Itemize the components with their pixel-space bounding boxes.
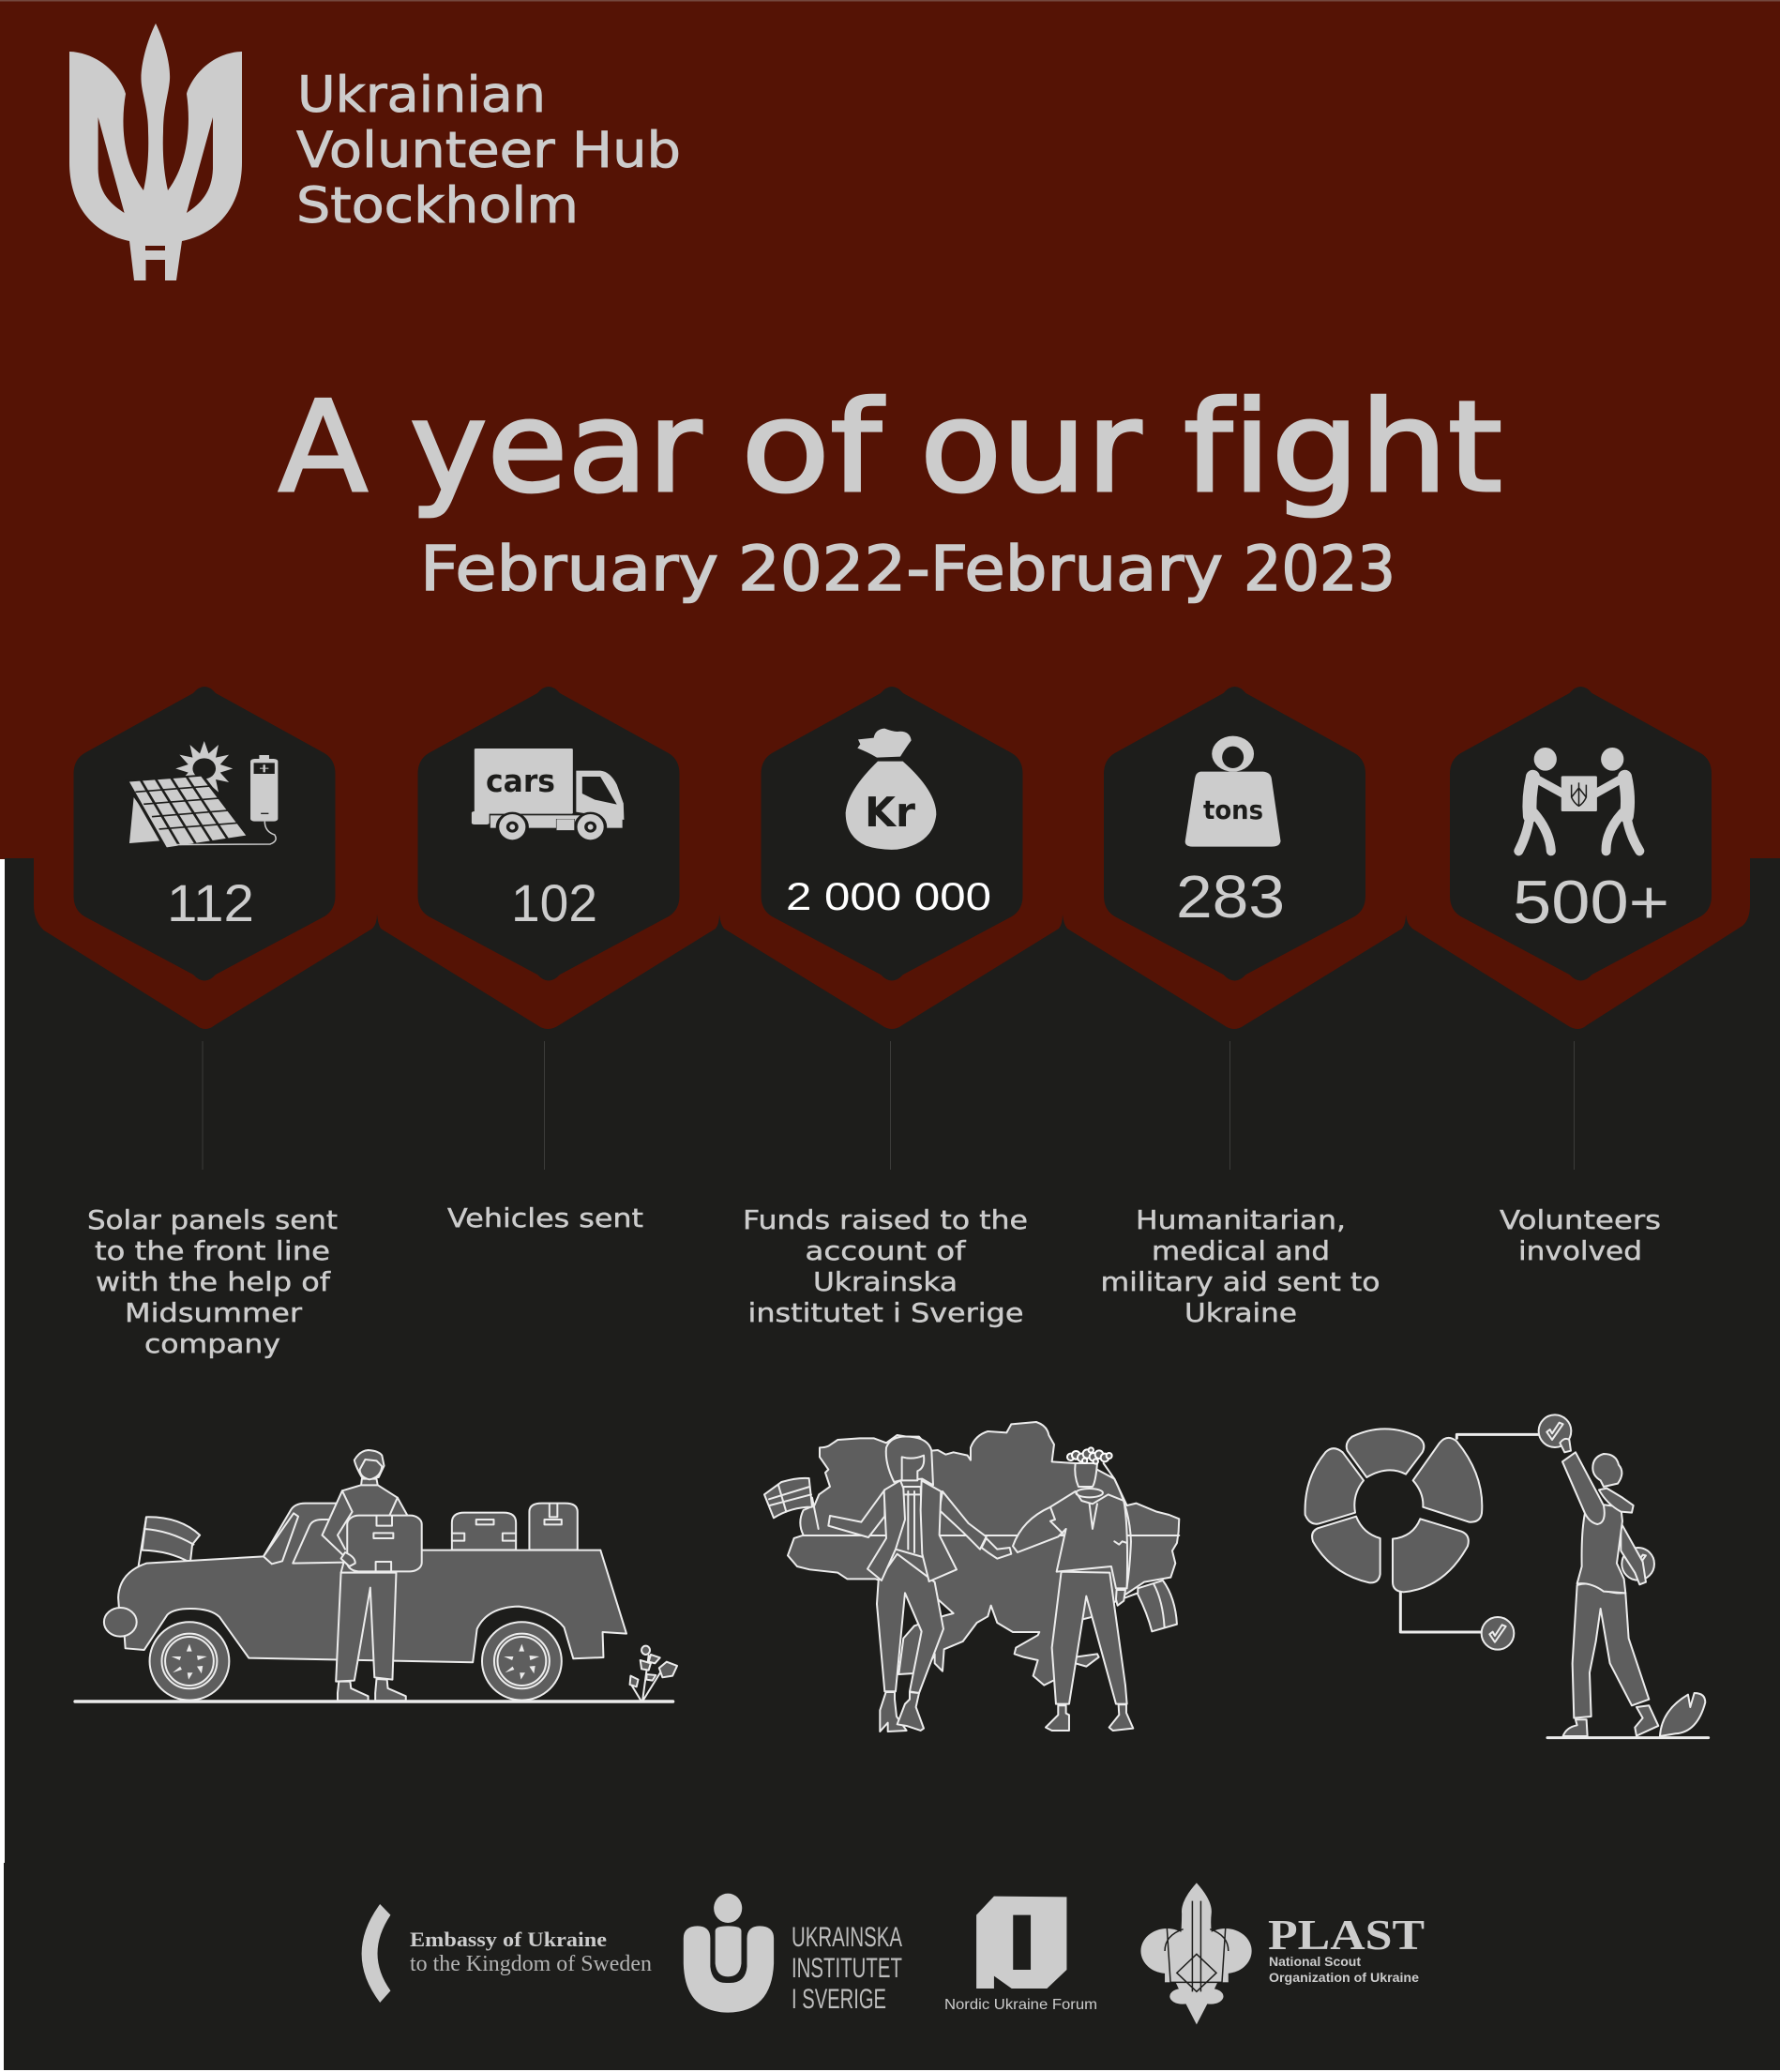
logo name: Volunteer Hub [296,122,681,179]
hexagon [73,687,336,981]
truck body [118,1504,626,1662]
Swedish flag [764,1478,819,1529]
ground line [1547,1736,1709,1739]
title [279,374,1502,521]
subtitle: 2023 [1244,533,1395,605]
connector top [1456,1434,1539,1438]
title: of [741,374,884,521]
logo: Embassy of Ukraine [362,1904,652,2003]
subtitle: 2022-February [738,533,1223,605]
logo: Embassy of Ukraine: to the Kingdom of Sweden [410,1952,652,1976]
panel: dark footer [4,1863,1780,2070]
text: solar panels description: to the front line [95,1236,330,1266]
panel: funds stat [762,687,1022,981]
plant [630,1646,677,1701]
logo: Plast: PLAST [1268,1911,1425,1959]
logo: Nordic Ukraine Forum [944,1897,1097,2013]
text: solar panels description: Solar panels sent [87,1205,338,1235]
text: solar panels description: Midsummer [125,1298,303,1328]
person [1560,1439,1658,1736]
logo: Plast [1140,1883,1425,2024]
text: vehicles description: Vehicles sent [447,1203,643,1233]
title: year [410,374,702,521]
rear wheel [482,1622,562,1701]
hexagon [1104,687,1365,981]
text: aid description: Humanitarian, [1136,1205,1346,1235]
front wheel [150,1622,229,1701]
text: volunteers description: Volunteers [1500,1205,1661,1235]
woman [828,1436,1011,1732]
text: funds description: Funds raised to the [743,1205,1028,1235]
icon label: tons: tons [1203,794,1263,825]
panel: vehicles stat [418,687,679,981]
text: aid description: Ukraine [1184,1298,1297,1328]
logo: Ukrainska Institutet i Sverige [684,1894,902,2015]
hexagon [418,687,679,981]
icon label: cars: cars [486,763,555,799]
logo: Plast: National Scout [1269,1954,1361,1969]
panel: dark body [5,858,1780,1864]
flag [137,1517,200,1578]
leaf [1660,1693,1705,1736]
value: 112: 112 [167,873,254,932]
man [1013,1447,1177,1731]
man [322,1450,422,1701]
text: aid description: medical and [1152,1236,1330,1266]
donut chart [1305,1429,1482,1592]
logo: trident [69,23,242,280]
flower wreath [1067,1447,1112,1464]
check badge top [1539,1414,1571,1447]
panel: red header [0,0,1780,859]
icon: weight [1185,736,1281,847]
icon: solar panel, sun and battery [128,741,278,849]
truck windows [264,1513,345,1564]
logo: Ukrainska Institutet i Sverige: INSTITUTET [792,1953,902,1984]
value: 102: 102 [511,873,597,932]
subtitle: February [420,533,718,605]
hexagon [762,687,1022,981]
icon: truck [472,749,624,842]
icon: two people carrying a box [1518,748,1639,851]
text: funds description: account of [805,1236,967,1266]
illustration: man with pickup truck [75,1450,677,1701]
value: 2 000 000: 2 000 000 [786,874,991,918]
panel: tons stat [1104,687,1365,981]
logo: Nordic Ukraine Forum: Nordic Ukraine Forum [944,1997,1097,2013]
text: aid description [1101,1205,1380,1328]
text: funds description [743,1205,1028,1328]
check badge bottom [1482,1617,1514,1650]
logo name [296,67,681,234]
text: solar panels description: company [144,1329,280,1359]
value: 283: 283 [1176,863,1285,930]
cargo boxes [452,1504,578,1550]
icon label: Kr: Kr [865,789,915,837]
connector bottom [1400,1592,1481,1632]
logo: Ukrainska Institutet i Sverige: UKRAINSKA [792,1922,902,1953]
value: 500+: 500+ [1513,868,1669,936]
logo name: Stockholm [296,177,579,234]
illustration: two people in front of Ukraine map [764,1422,1179,1732]
logo: Plast: Organization of Ukraine [1269,1970,1419,1985]
panel: red hexagon tabs [34,857,1750,1029]
subtitle [420,533,1395,605]
text: volunteers description: involved [1518,1236,1642,1266]
headlight [104,1608,137,1637]
text: funds description: Ukrainska [813,1267,958,1297]
title: A [279,374,368,521]
logo: Embassy of Ukraine: Embassy of Ukraine [410,1928,607,1951]
logo name: Ukrainian [297,67,546,124]
panel: solar panels stat [73,687,336,981]
panel: volunteers stat [1450,687,1712,981]
text: funds description: institutet i Sverige [748,1298,1024,1328]
text: solar panels description: with the help of [96,1267,332,1297]
title: our [920,374,1142,521]
text: solar panels description [87,1205,338,1359]
map of Ukraine [788,1422,1179,1686]
text: volunteers description [1500,1205,1661,1266]
logo: Ukrainska Institutet i Sverige: I SVERIGE [792,1984,886,2015]
title: fight [1184,374,1502,521]
ground line [75,1700,673,1703]
icon: money bag [846,729,936,850]
illustration: donut chart and person pressing check [1305,1414,1709,1738]
hexagon [1450,687,1712,981]
check badge back [1622,1548,1654,1580]
text: aid description: military aid sent to [1101,1267,1380,1297]
